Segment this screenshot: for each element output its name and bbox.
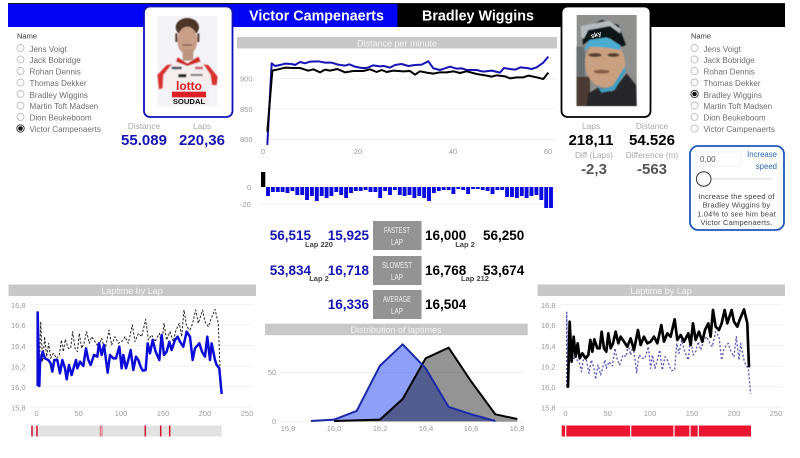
- line chart: left laptime by lap: 16,6: [11, 321, 26, 330]
- comparison row: slowest lap: Lap 212: [461, 274, 489, 283]
- radio list: right rider selector: Martin Toft Madsen: [704, 102, 772, 111]
- line chart: left laptime by lap: 16,2: [11, 362, 26, 372]
- comparison row: average lap: 16,504: [425, 297, 467, 312]
- bar chart: difference per minute: -20: [240, 200, 251, 209]
- callout: increase speed control: Bradley Wiggins by: [703, 200, 770, 210]
- radio list: right rider selector: Bradley Wiggins: [704, 91, 762, 100]
- line chart: right laptime by lap: 16,8: [541, 301, 556, 310]
- stat: right distance and difference: Distance: [636, 121, 669, 131]
- heading: right Laptime by Lap: [538, 284, 785, 296]
- stat: right laps and diff: Laps: [582, 121, 600, 131]
- line chart: right laptime by lap: 16,6: [541, 321, 556, 330]
- radio list: left rider selector: Thomas Dekker: [30, 79, 87, 88]
- radio list: left rider selector: Jack Bobridge: [30, 56, 81, 65]
- stat: right laps and diff: Diff (Laps): [575, 150, 613, 160]
- heading: Distribution of laptimes: Distribution of laptimes: [350, 325, 442, 335]
- line chart: distance per minute: 800: [240, 135, 253, 144]
- radio list: right rider selector: [691, 32, 775, 134]
- comparison row: slowest lap: 53,674: [483, 263, 525, 278]
- comparison row: slowest lap: 16,718: [328, 263, 369, 278]
- comparison row: slowest lap: 53,834: [270, 263, 311, 278]
- stat: left distance: Distance: [128, 121, 161, 131]
- area chart: distribution of laptimes: 16,2: [373, 424, 387, 433]
- line chart: left laptime by lap: [11, 301, 253, 418]
- stat: right distance and difference: Difference (m): [626, 150, 678, 160]
- area chart: distribution of laptimes: 16,8: [510, 424, 524, 433]
- stat: right laps and diff: [568, 121, 614, 178]
- line chart: left laptime by lap: 250: [241, 409, 253, 418]
- comparison row: fastest lap: LAP: [391, 238, 403, 247]
- rider photo card: Bradley Wiggins: sky: [590, 30, 603, 40]
- comparison row: fastest lap: Lap 220: [305, 240, 333, 249]
- comparison row: fastest lap: [270, 221, 524, 250]
- line chart: right laptime by lap: 16,4: [541, 342, 556, 351]
- rider photo card: Victor Campenaerts: lotto: [176, 79, 202, 93]
- area chart: distribution of laptimes: 0: [272, 417, 276, 426]
- callout: increase speed control: 0,00: [700, 155, 716, 164]
- radio list: left rider selector: Victor Campenaerts: [30, 125, 101, 134]
- strip: right record laps: [562, 426, 751, 436]
- radio list: left rider selector: Bradley Wiggins: [30, 91, 88, 100]
- callout: increase speed control: speed: [756, 162, 777, 171]
- radio list: left rider selector: Name: [17, 32, 37, 40]
- area chart: distribution of laptimes: 16,4: [419, 424, 433, 433]
- header banner: [8, 3, 785, 27]
- comparison row: fastest lap: 56,250: [483, 228, 524, 243]
- heading: Distance per minute: Distance per minute: [357, 38, 437, 48]
- comparison row: fastest lap: 16,000: [425, 228, 466, 243]
- radio list: right rider selector: Jens Voigt: [704, 45, 742, 54]
- stat: right distance and difference: 54.526: [629, 132, 675, 149]
- radio list: right rider selector: Name: [691, 32, 711, 40]
- area chart: distribution of laptimes: 16,0: [327, 424, 341, 433]
- line chart: distance per minute: 20: [354, 147, 362, 156]
- line chart: right laptime by lap: 16,2: [541, 362, 556, 372]
- comparison row: slowest lap: LAP: [391, 273, 403, 282]
- stat: right laps and diff: 218,11: [568, 132, 614, 149]
- line chart: left laptime by lap: 100: [115, 409, 127, 418]
- radio list: right rider selector: Victor Campenaerts: [704, 125, 775, 134]
- radio list: right rider selector: Rohan Dennis: [704, 68, 755, 76]
- line chart: distance per minute: 40: [449, 147, 457, 156]
- callout: increase speed control: 1.04% to see him beat: [697, 210, 777, 218]
- radio list: left rider selector: Rohan Dennis: [30, 68, 81, 76]
- rider photo card: Victor Campenaerts: SOUDAL: [173, 97, 205, 106]
- line chart: left laptime by lap: 16,8: [11, 301, 26, 310]
- line chart: right laptime by lap: [541, 301, 783, 418]
- radio list: left rider selector: Dion Beukeboom: [30, 114, 92, 122]
- line chart: left laptime by lap: 15,8: [11, 404, 26, 412]
- callout: increase speed control: Increase: [747, 150, 777, 159]
- stat: right laps and diff: -2,3: [581, 161, 607, 178]
- line chart: right laptime by lap: 0: [563, 409, 568, 418]
- comparison row: fastest lap: Lap 2: [455, 240, 475, 249]
- line chart: right laptime by lap: 100: [644, 409, 656, 418]
- heading: Distance per minute: [237, 37, 557, 48]
- rider photo card: Bradley Wiggins: [562, 6, 650, 117]
- line chart: left laptime by lap: 0: [34, 409, 39, 418]
- callout: increase speed control: [690, 146, 784, 230]
- line chart: right laptime by lap: 250: [770, 409, 782, 418]
- strip: left record laps: [31, 426, 222, 436]
- comparison row: fastest lap: 56,515: [270, 228, 311, 243]
- comparison row: fastest lap: 15,925: [328, 228, 369, 243]
- comparison row: average lap: LAP: [391, 307, 403, 316]
- comparison row: slowest lap: 16,768: [425, 263, 467, 278]
- heading: left Laptime by Lap: [8, 284, 256, 296]
- stat: left laps: 220,36: [179, 132, 225, 149]
- line chart: distance per minute: 60: [544, 147, 552, 156]
- line chart: right laptime by lap: 16,0: [541, 383, 556, 392]
- stat: left laps: Laps: [193, 121, 211, 131]
- comparison row: fastest lap: FASTEST: [384, 226, 410, 235]
- line chart: distance per minute: [240, 57, 557, 156]
- bar chart: difference per minute: [240, 172, 556, 209]
- line chart: right laptime by lap: 50: [604, 409, 612, 418]
- line chart: distance per minute: 850: [240, 105, 253, 114]
- radio list: left rider selector: [17, 32, 101, 134]
- stat: left distance: [121, 121, 167, 149]
- line chart: left laptime by lap: 150: [157, 409, 169, 418]
- radio list: right rider selector: Thomas Dekker: [704, 79, 761, 88]
- rider photo card: Victor Campenaerts: [144, 6, 232, 117]
- line chart: left laptime by lap: 200: [199, 409, 211, 418]
- header banner: Victor Campenaerts: [249, 8, 384, 24]
- comparison row: slowest lap: Lap 2: [309, 274, 329, 283]
- callout: increase speed control: Increase the speed of: [698, 192, 775, 201]
- header banner: Bradley Wiggins: [422, 8, 534, 24]
- radio list: right rider selector: Jack Bobridge: [704, 56, 755, 65]
- heading: left Laptime by Lap: Laptime by Lap: [101, 286, 163, 296]
- radio list: right rider selector: Dion Beukeboom: [704, 114, 766, 122]
- area chart: distribution of laptimes: 16,6: [464, 424, 478, 433]
- line chart: left laptime by lap: 16,4: [11, 342, 26, 351]
- comparison row: slowest lap: [270, 256, 525, 285]
- line chart: left laptime by lap: 50: [75, 409, 83, 418]
- stat: left distance: 55.089: [121, 132, 167, 149]
- line chart: left laptime by lap: 16,0: [11, 383, 26, 392]
- bar chart: difference per minute: 0: [247, 183, 251, 192]
- comparison row: average lap: [328, 290, 467, 319]
- area chart: distribution of laptimes: [268, 344, 525, 433]
- radio list: left rider selector: Martin Toft Madsen: [30, 102, 98, 111]
- comparison row: slowest lap: SLOWEST: [382, 261, 412, 270]
- comparison row: average lap: AVERAGE: [383, 295, 411, 304]
- line chart: right laptime by lap: 150: [686, 409, 698, 418]
- comparison row: average lap: 16,336: [328, 297, 369, 312]
- heading: right Laptime by Lap: Laptime by Lap: [630, 286, 692, 296]
- line chart: right laptime by lap: 200: [728, 409, 740, 418]
- line chart: distance per minute: 900: [240, 74, 253, 84]
- line chart: right laptime by lap: 15,8: [541, 404, 556, 412]
- callout: increase speed control: Victor Campenaerts.: [700, 218, 773, 227]
- stat: right distance and difference: -563: [637, 161, 667, 178]
- area chart: distribution of laptimes: 50: [268, 368, 276, 377]
- radio list: left rider selector: Jens Voigt: [30, 45, 68, 54]
- area chart: distribution of laptimes: 15,8: [281, 424, 295, 433]
- stat: left laps: [179, 121, 225, 149]
- heading: Distribution of laptimes: [265, 324, 528, 335]
- line chart: distance per minute: 0: [261, 147, 265, 156]
- stat: right distance and difference: [626, 121, 678, 178]
